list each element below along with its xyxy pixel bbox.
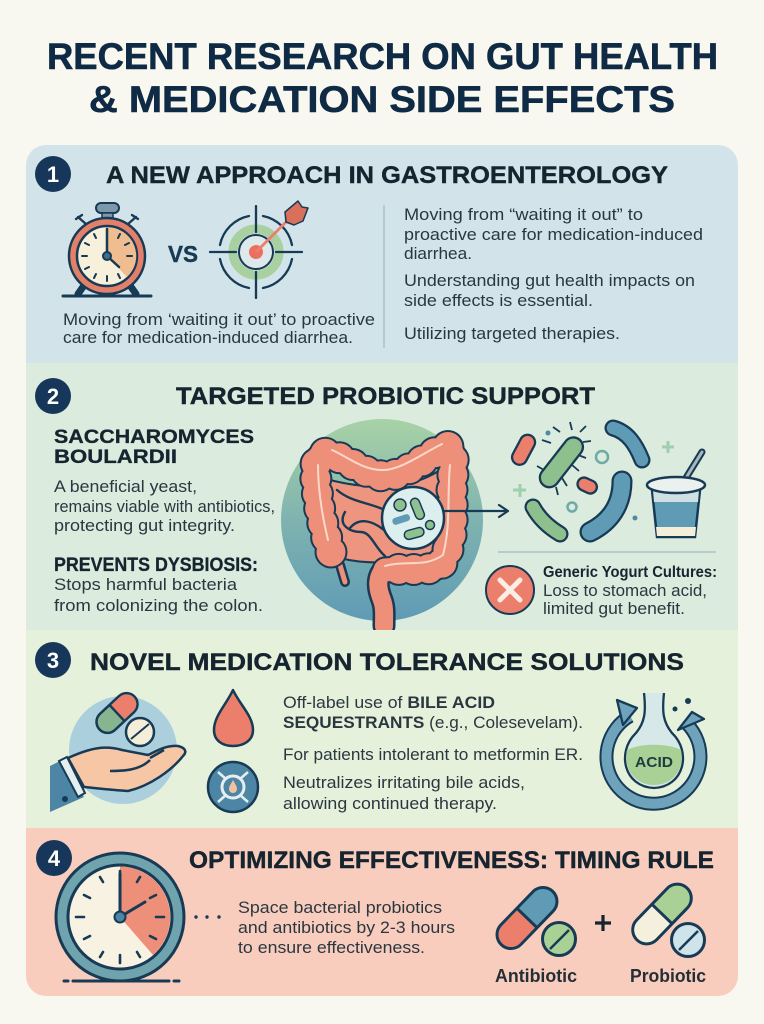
text block: timing: Space bacterial probiotics	[238, 898, 442, 917]
text block: bile acid sequestrants: SEQUESTRANTS (e.g., Colesevelam).	[283, 713, 583, 732]
dots	[194, 915, 221, 919]
title: & MEDICATION SIDE EFFECTS	[89, 79, 675, 120]
text block right: Utilizing targeted therapies.	[404, 324, 620, 343]
icon: stopwatch	[63, 203, 151, 296]
icon: red x	[486, 566, 534, 614]
text block right	[404, 205, 703, 343]
number badge 3	[35, 642, 71, 678]
icon: crossed-out drop	[208, 762, 258, 812]
text block: prevents dysbiosis	[54, 555, 263, 615]
panel: a new approach in gastroenterology	[26, 145, 738, 363]
text block: saccharomyces boulardii	[54, 427, 275, 535]
text block right: Understanding gut health impacts on	[404, 271, 695, 290]
heading 1: A NEW APPROACH IN GASTROENTEROLOGY	[106, 162, 668, 189]
number badge 3: 3	[47, 648, 59, 673]
panel: novel medication tolerance solutions	[26, 630, 738, 828]
text block: generic yogurt cultures: Loss to stomach acid,	[543, 581, 707, 600]
icon: acid flask with circular arrows: ACID	[635, 754, 673, 771]
arrow to bacteria	[445, 505, 508, 517]
panel: optimizing effectiveness timing rule	[26, 828, 738, 996]
label: probiotic: Probiotic	[630, 966, 706, 986]
number badge 2	[35, 378, 71, 414]
icon: target with arrow	[210, 201, 308, 298]
colon outline scallops	[315, 444, 453, 626]
icon: intestine in circle	[281, 419, 483, 626]
text block: saccharomyces boulardii: remains viable with antibiotics,	[54, 497, 275, 516]
icon: bacteria group	[509, 422, 674, 534]
text block right: diarrhea.	[404, 244, 472, 263]
title: RECENT RESEARCH ON GUT HEALTH	[47, 36, 718, 77]
text block: bile acid sequestrants: allowing continued therapy.	[283, 794, 497, 813]
title	[47, 36, 718, 120]
text block right: side effects is essential.	[404, 291, 593, 310]
panel: targeted probiotic support	[26, 363, 738, 630]
number badge 1	[35, 156, 71, 192]
text block: prevents dysbiosis: PREVENTS DYSBIOSIS:	[54, 555, 258, 576]
icon: yogurt cup	[647, 452, 705, 537]
vs label: VS	[168, 241, 198, 267]
icon: antibiotic capsule and tablet	[491, 882, 576, 956]
text block: saccharomyces boulardii: BOULARDII	[54, 447, 177, 468]
caption left: Moving from ‘waiting it out’ to proactive	[63, 310, 375, 329]
text block: bile acid sequestrants: Neutralizes irritating bile acids,	[283, 773, 525, 792]
text block: timing	[238, 898, 455, 957]
text block: saccharomyces boulardii: A beneficial yeast,	[54, 477, 197, 496]
text block: generic yogurt cultures: limited gut benefit.	[543, 599, 685, 618]
text block: timing: to ensure effectiveness.	[238, 938, 425, 957]
text block: saccharomyces boulardii: SACCHAROMYCES	[54, 427, 254, 448]
icon: probiotic capsule and tablet	[627, 878, 704, 956]
icon: blood drop	[214, 690, 253, 746]
magnifier: microbes	[382, 487, 444, 549]
icon: hand with pills	[50, 689, 185, 812]
number badge 4: 4	[48, 846, 61, 871]
text block: prevents dysbiosis: from colonizing the colon.	[54, 596, 263, 615]
number badge 2: 2	[47, 384, 59, 409]
text block: bile acid sequestrants: For patients intolerant to metformin ER.	[283, 745, 583, 764]
caption left	[63, 310, 375, 347]
text block: generic yogurt cultures	[543, 564, 717, 618]
icon: acid flask with circular arrows	[606, 693, 704, 804]
label: antibiotic: Antibiotic	[495, 966, 577, 986]
text block right: Moving from “waiting it out” to	[404, 205, 643, 224]
number badge 1: 1	[47, 162, 59, 187]
plus sign	[595, 915, 611, 931]
text block right: proactive care for medication-induced	[404, 225, 703, 244]
text block: bile acid sequestrants: Off-label use of BILE ACID	[283, 693, 495, 712]
text block: prevents dysbiosis: Stops harmful bacteria	[54, 575, 238, 594]
heading 2: TARGETED PROBIOTIC SUPPORT	[176, 383, 595, 410]
text block: saccharomyces boulardii: protecting gut integrity.	[54, 516, 235, 535]
number badge 4	[36, 840, 72, 876]
heading 3: NOVEL MEDICATION TOLERANCE SOLUTIONS	[90, 649, 684, 676]
text block: timing: and antibiotics by 2-3 hours	[238, 918, 455, 937]
heading 4: OPTIMIZING EFFECTIVENESS: TIMING RULE	[189, 847, 714, 874]
text block: generic yogurt cultures: Generic Yogurt Cultures:	[543, 564, 717, 581]
caption left: care for medication-induced diarrhea.	[63, 328, 353, 347]
icon: clock	[56, 853, 184, 981]
text block: bile acid sequestrants	[283, 693, 583, 813]
